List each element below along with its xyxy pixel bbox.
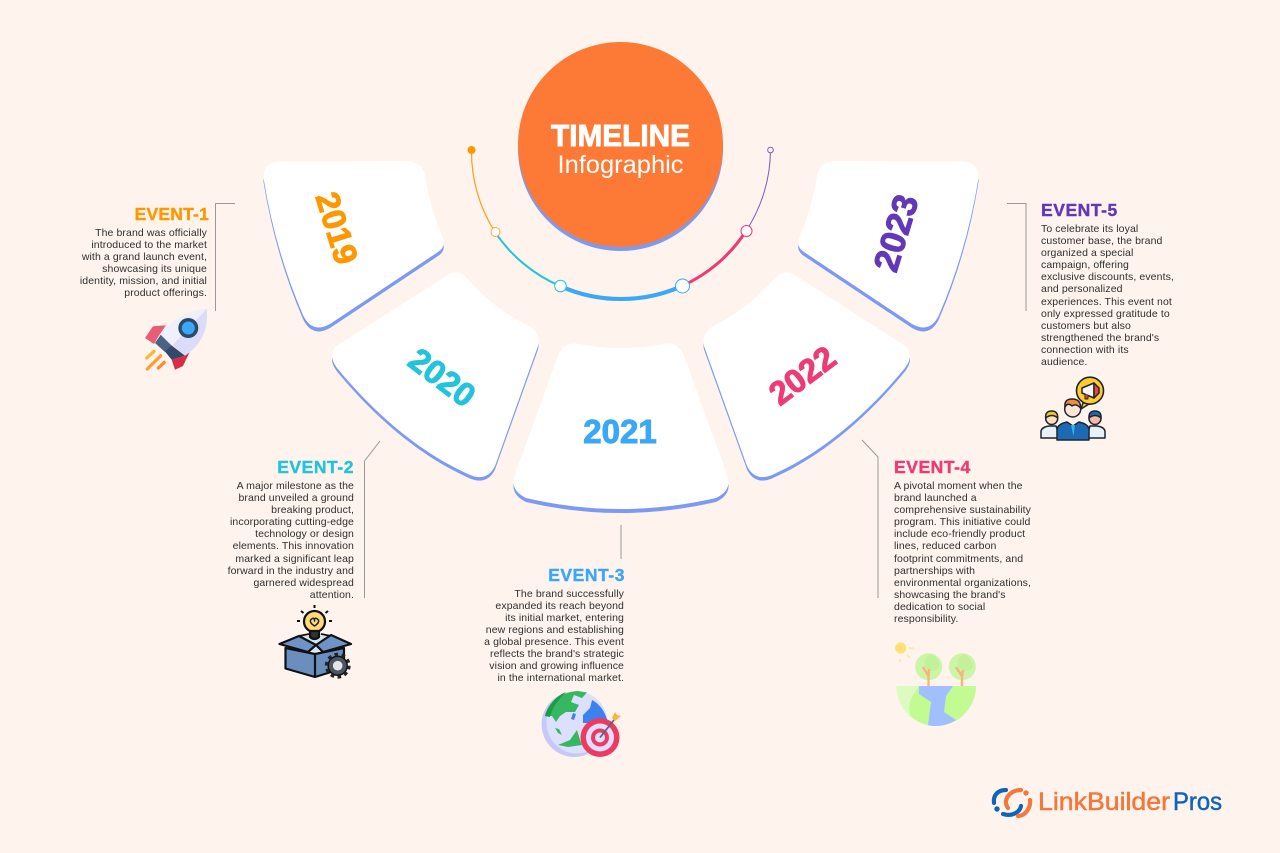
event 3 text: a global presence. This event: [484, 636, 624, 648]
card: 2020: [332, 272, 539, 481]
logo mark: [994, 790, 1030, 816]
title circle: [518, 42, 723, 251]
card: 2019: [263, 161, 444, 331]
card: 2023: 2023: [866, 190, 927, 276]
card: 2019: 2019: [309, 188, 365, 269]
event 3 text: [484, 565, 625, 684]
card: 2023: [798, 161, 979, 331]
title: TIMELINE: [551, 118, 690, 153]
event 5 text: To celebrate its loyal: [1041, 223, 1138, 235]
event 1 text: introduced to the market: [91, 239, 207, 251]
icon: earth with trees: [895, 642, 976, 726]
event 3 text: vision and growing influence: [489, 660, 624, 672]
event 4 text: environmental organizations,: [894, 577, 1031, 589]
logo: [994, 788, 1222, 816]
event 2 text: attention.: [310, 589, 354, 601]
event 4 text: include eco-friendly product: [894, 528, 1025, 540]
event 5 text: campaign, offering: [1041, 259, 1129, 271]
event 5 text: audience.: [1041, 356, 1087, 368]
event 2 text: elements. This innovation: [233, 540, 354, 552]
event 4 text: comprehensive sustainability: [894, 504, 1032, 516]
event 2 text: breaking product,: [271, 504, 354, 516]
event 1 text: The brand was officially: [95, 227, 208, 239]
card: 2022: 2022: [762, 339, 843, 412]
event 2 text: technology or design: [255, 528, 354, 540]
event 2 text: [228, 457, 354, 601]
event 5 text: and personalized: [1041, 283, 1123, 295]
event 5 text: exclusive discounts, events,: [1041, 271, 1174, 283]
event 4 text: partnerships with: [894, 565, 975, 577]
event 2 text: EVENT-2: [277, 457, 354, 477]
event 2 text: incorporating cutting-edge: [230, 516, 354, 528]
event 1 text: [80, 204, 209, 299]
event 2 text: marked a significant leap: [235, 553, 354, 565]
event 3 text: in the international market.: [497, 672, 624, 684]
event 1 text: EVENT-1: [135, 204, 209, 224]
event 5 text: connection with its: [1041, 344, 1129, 356]
event 1 text: with a grand launch event,: [81, 251, 207, 263]
card: 2020: 2020: [402, 341, 483, 414]
icon: rocket: [145, 309, 207, 370]
event 4 text: [894, 457, 1032, 625]
event 3 text: The brand successfully: [514, 588, 625, 600]
event 4 text: showcasing the brand's: [894, 589, 1006, 601]
event 1 text: product offerings.: [124, 287, 207, 299]
event 5 text: organized a special: [1041, 247, 1133, 259]
leader lines: [216, 204, 1026, 598]
subtitle: Infographic: [558, 151, 684, 179]
card: 2021: 2021: [583, 413, 657, 450]
event 4 text: A pivotal moment when the: [894, 480, 1023, 492]
event 2 text: garnered widespread: [253, 577, 354, 589]
event 5 text: customers but also: [1041, 320, 1131, 332]
icon: globe with target: [542, 691, 621, 757]
event 5 text: EVENT-5: [1041, 200, 1118, 220]
event 2 text: forward in the industry and: [228, 565, 354, 577]
card: 2021: [513, 343, 729, 513]
event 4 text: brand launched a: [894, 492, 977, 504]
timeline arc: [468, 146, 773, 299]
event 4 text: dedication to social: [894, 601, 985, 613]
event 2 text: A major milestone as the: [237, 480, 354, 492]
event 3 text: new regions and establishing: [486, 624, 624, 636]
event 4 text: program. This initiative could: [894, 516, 1031, 528]
icon: team with megaphone: [1041, 377, 1105, 440]
event 4 text: lines, reduced carbon: [894, 540, 997, 552]
card: 2022: [703, 272, 910, 481]
event 5 text: strengthened the brand's: [1041, 332, 1159, 344]
event 5 text: experiences. This event not: [1041, 296, 1172, 308]
event 2 text: brand unveiled a ground: [238, 492, 354, 504]
event 4 text: responsibility.: [894, 613, 958, 625]
event 3 text: EVENT-3: [548, 565, 625, 585]
event 5 text: [1041, 200, 1174, 368]
icon: box with bulb and gear: [280, 605, 351, 677]
logo text: Pros: [1173, 788, 1222, 816]
event 5 text: only expressed gratitude to: [1041, 308, 1170, 320]
event 1 text: showcasing its unique: [102, 263, 207, 275]
event 1 text: identity, mission, and initial: [80, 275, 207, 287]
event 4 text: footprint commitments, and: [894, 553, 1023, 565]
event 5 text: customer base, the brand: [1041, 235, 1163, 247]
event 3 text: its initial market, entering: [505, 612, 624, 624]
event 3 text: reflects the brand's strategic: [490, 648, 624, 660]
event 4 text: EVENT-4: [894, 457, 971, 477]
logo text: LinkBuilder: [1038, 788, 1170, 816]
event 3 text: expanded its reach beyond: [495, 600, 624, 612]
